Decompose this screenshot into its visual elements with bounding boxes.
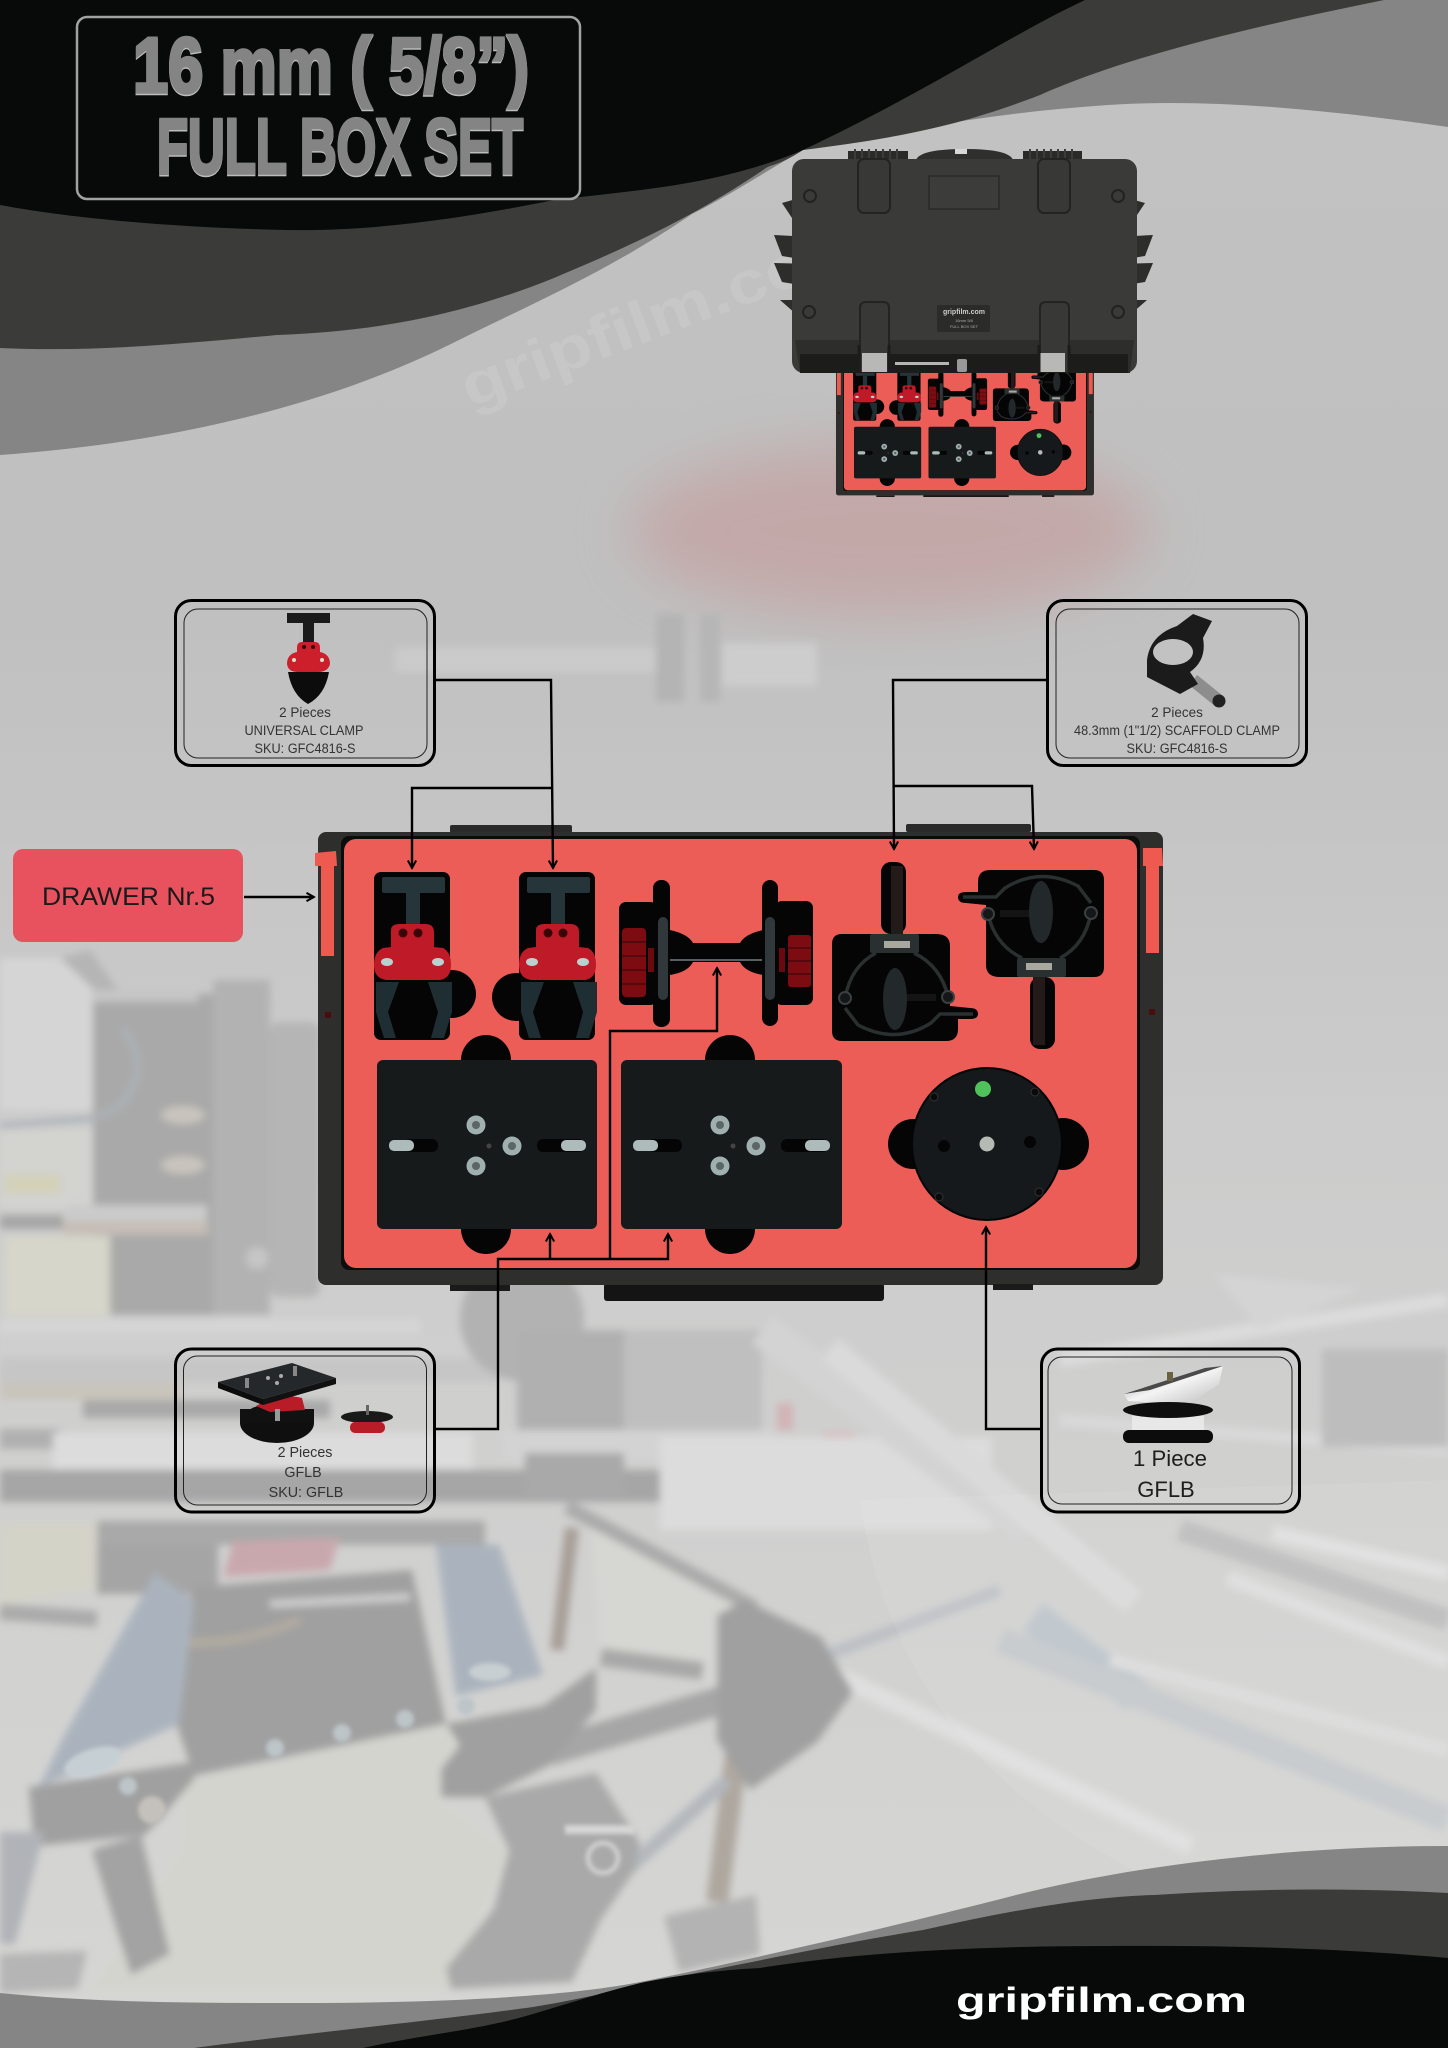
callout: scaffold clamp bbox=[1048, 600, 1306, 766]
round mount bbox=[912, 1068, 1062, 1220]
label recess bbox=[929, 176, 999, 209]
centre mechanical blur bbox=[460, 1257, 584, 1381]
GFLB one piece text: 1 Piece bbox=[1133, 1446, 1207, 1471]
screws bbox=[804, 190, 816, 202]
icon: universal clamp bbox=[287, 613, 330, 704]
GFLB text: 2 Pieces bbox=[278, 1445, 332, 1461]
drawer frame bbox=[318, 832, 1163, 1285]
straps bbox=[858, 159, 890, 213]
GFLB one piece text bbox=[1133, 1446, 1207, 1502]
scaffold clamp text: 48.3mm (1"1/2) SCAFFOLD CLAMP bbox=[1074, 723, 1280, 738]
case plate label: gripfilm.com bbox=[943, 309, 985, 316]
connector: scaffold clamp to slots bbox=[893, 680, 1046, 849]
icon: small knob bbox=[341, 1411, 393, 1423]
icon: silver dome mount bbox=[1123, 1366, 1223, 1443]
callout: GFLB one piece bbox=[1042, 1349, 1300, 1512]
scaffold clamp text: 2 Pieces bbox=[1151, 705, 1203, 720]
title line 2 bbox=[157, 102, 523, 192]
stacked horizontal rods bbox=[0, 1319, 420, 1333]
title line 1: 16 mm ( 5/8”) bbox=[133, 21, 529, 109]
title line 1: 16 mm ( 5/8”) bbox=[133, 22, 529, 110]
website footer text: gripfilm.com bbox=[956, 1981, 1247, 2020]
foam slots bbox=[374, 872, 1089, 1254]
soft lighter wash on right bbox=[860, 1480, 1448, 1900]
mini open drawer under case bbox=[836, 373, 1094, 497]
red tabs bbox=[315, 851, 337, 956]
universal clamp 1 bbox=[374, 877, 452, 1038]
universal clamp text: 2 Pieces bbox=[279, 705, 331, 720]
bottom swoosh: dark layer bbox=[194, 1889, 1448, 2048]
case plate label: 16mm 5/8 bbox=[955, 318, 974, 323]
universal clamp text bbox=[244, 705, 364, 756]
connector: GFLB to plates and dumbbell bbox=[435, 968, 717, 1429]
rig bbox=[97, 1521, 485, 1545]
plate 1 bbox=[377, 1060, 597, 1229]
drawer label callout: DRAWER Nr.5 bbox=[42, 883, 215, 911]
red foam bbox=[344, 839, 1137, 1268]
latches bbox=[862, 353, 887, 372]
drawer label callout bbox=[13, 849, 243, 942]
universal clamp text: SKU: GFC4816-S bbox=[254, 741, 356, 756]
arrow: drawer label to drawer bbox=[244, 896, 314, 898]
drawer latches and handle bbox=[450, 825, 572, 833]
top swoosh: dark layer bbox=[0, 0, 1384, 349]
GFLB text: SKU: GFLB bbox=[269, 1485, 343, 1501]
case plate label: FULL BOX SET bbox=[950, 324, 979, 329]
title line 2: FULL BOX SET bbox=[157, 102, 523, 190]
bottom swoosh: black layer bbox=[363, 1946, 1448, 2048]
plate 2 bbox=[621, 1060, 842, 1229]
title box bbox=[77, 17, 580, 199]
watermark: gripfilm.com bbox=[451, 207, 877, 420]
universal clamp text: UNIVERSAL CLAMP bbox=[244, 723, 364, 738]
GFLB one piece text: GFLB bbox=[1137, 1477, 1195, 1502]
red blob bbox=[630, 445, 1150, 615]
side fins bbox=[774, 199, 812, 314]
ground bbox=[0, 1524, 97, 1605]
case plate label bbox=[937, 305, 990, 332]
dumbbell mount bbox=[622, 917, 811, 1000]
main open drawer bbox=[315, 824, 1163, 1301]
rig details bbox=[60, 1663, 635, 1873]
top swoosh: mid grey layer bbox=[0, 0, 1448, 455]
icon: scaffold clamp bbox=[1147, 614, 1226, 708]
connector: universal clamp to slots bbox=[412, 680, 553, 868]
right side rods bbox=[762, 1330, 1030, 1530]
bottom swoosh: mid grey layer bbox=[0, 1846, 1448, 2048]
title line 2: FULL BOX SET bbox=[157, 104, 523, 192]
scaffold clamp right bbox=[958, 870, 1104, 1049]
universal clamp 2 bbox=[519, 877, 597, 1038]
GFLB text: GFLB bbox=[284, 1465, 322, 1481]
case body bbox=[792, 159, 1137, 373]
callout: universal clamp bbox=[176, 600, 434, 766]
camera area bbox=[0, 958, 92, 1110]
icon: leveling base with plate bbox=[218, 1363, 393, 1443]
upper pipes bbox=[395, 648, 657, 672]
hinge ribs bbox=[848, 151, 1082, 160]
closed transport case bbox=[774, 149, 1153, 373]
case handle bbox=[916, 149, 1013, 160]
GFLB text bbox=[269, 1445, 343, 1501]
top swoosh: black layer bbox=[0, 0, 1085, 230]
scaffold clamp text bbox=[1074, 705, 1280, 756]
connector: GFLB one piece to round mount bbox=[986, 1227, 1041, 1429]
callout: GFLB two pieces bbox=[176, 1349, 434, 1512]
scaffold clamp text: SKU: GFC4816-S bbox=[1126, 741, 1228, 756]
scaffold clamp left bbox=[832, 862, 978, 1041]
